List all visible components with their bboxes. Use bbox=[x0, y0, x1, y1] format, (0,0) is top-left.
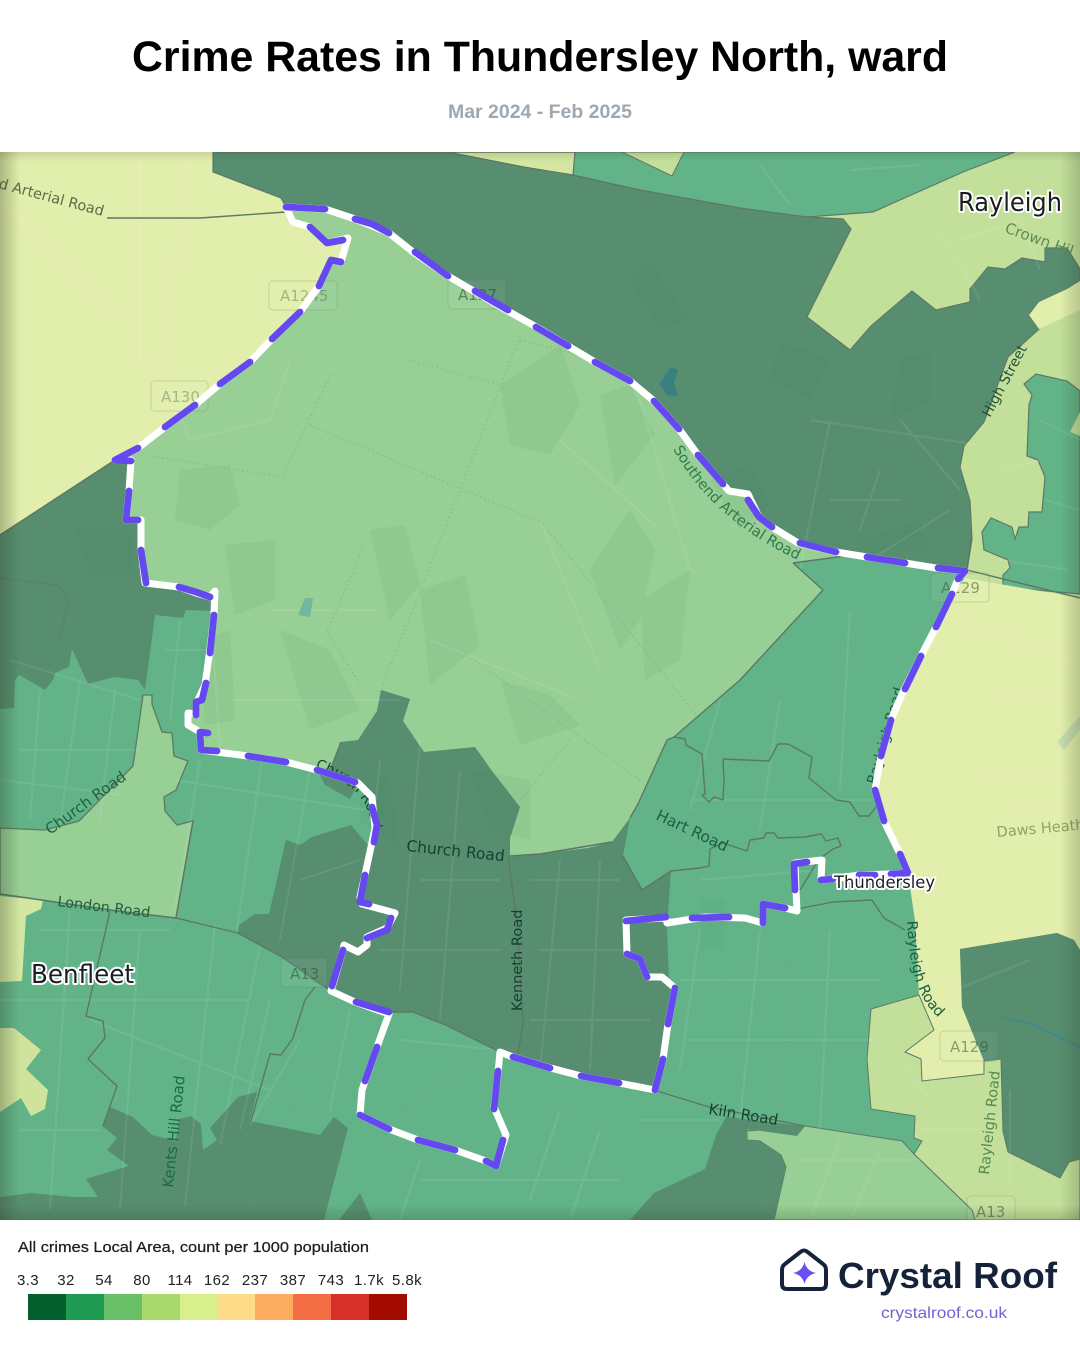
logo wordmark: Crystal Roof bbox=[838, 1255, 1058, 1296]
area: yellow sliver east edge bbox=[1070, 412, 1080, 436]
area: dark green west bbox=[0, 460, 212, 709]
area: yellow triangle north bbox=[622, 152, 684, 176]
legend scale values: 162 bbox=[204, 1272, 230, 1289]
road label: Church Road west: Church Road bbox=[42, 768, 130, 838]
road label: Church Road (under ward line): Church Road bbox=[317, 760, 383, 826]
area: mid green north strip bbox=[573, 152, 1015, 217]
area: dark green Kents Hill bbox=[0, 1092, 348, 1220]
legend colour bar bbox=[28, 1294, 407, 1320]
area: yellow-green north-east bbox=[780, 152, 1080, 598]
road label: Church Road centre: Church Road bbox=[406, 837, 506, 865]
road shield labels: A1245 bbox=[280, 287, 328, 305]
area: pale strip north bbox=[447, 152, 575, 176]
area: pale patch south-west bbox=[0, 1028, 48, 1116]
road shields bbox=[151, 280, 1015, 1226]
legend scale values: 237 bbox=[242, 1272, 268, 1289]
road label: High Street: High Street bbox=[979, 342, 1031, 420]
place label: Benfleet: Benfleet bbox=[31, 960, 134, 990]
area: pale yellow east bbox=[875, 578, 1080, 1081]
subtitle: date range: Mar 2024 - Feb 2025 bbox=[448, 102, 632, 123]
road label: Rayleigh Road south: Rayleigh Road bbox=[905, 922, 946, 1017]
legend scale values: 743 bbox=[318, 1272, 344, 1289]
website link text: crystalroof.co.uk bbox=[881, 1305, 1008, 1322]
road label: Rayleigh Road south-east: Rayleigh Road bbox=[976, 1070, 1004, 1175]
place label: Thundersley: Thundersley bbox=[833, 873, 935, 893]
legend scale values: 80 bbox=[133, 1272, 151, 1289]
road label: Southend Arterial Road: Southend Arterial Road bbox=[674, 446, 802, 560]
logo: Crystal Roof bbox=[782, 1250, 1058, 1322]
icon: house outline bbox=[782, 1250, 826, 1289]
map edge vignette bbox=[0, 152, 1080, 1220]
icon: crystal star bbox=[793, 1262, 816, 1284]
road shield labels: A129 bbox=[950, 1038, 989, 1056]
panel: choropleth map bbox=[0, 152, 1080, 1220]
legend scale values: 5.8k bbox=[392, 1272, 422, 1289]
road label: Hart Road: Hart Road bbox=[653, 806, 731, 855]
area: pale patch north-east bbox=[1029, 281, 1080, 329]
legend scale values bbox=[17, 1272, 422, 1289]
area: light green Church Road west bbox=[0, 695, 193, 918]
ward boundary: purple dashes bbox=[115, 207, 965, 1166]
place label: Rayleigh: Rayleigh bbox=[958, 188, 1062, 218]
road label: Arterial Road: d Arterial Road bbox=[0, 176, 106, 220]
road label: Kenneth Road: Kenneth Road bbox=[509, 909, 526, 1011]
road shield labels: A13 bbox=[290, 965, 319, 983]
area: light green south bbox=[747, 1126, 975, 1220]
area: pale patch Benfleet bbox=[0, 896, 43, 982]
legend title: All crimes Local Area, count per 1000 population bbox=[18, 1239, 369, 1256]
road shield labels: A130 bbox=[161, 388, 200, 406]
legend scale values: 54 bbox=[95, 1272, 113, 1289]
legend scale values: 114 bbox=[167, 1272, 193, 1289]
legend scale values: 1.7k bbox=[354, 1272, 384, 1289]
legend bbox=[17, 1239, 422, 1320]
road network bbox=[0, 160, 1080, 1220]
road label: Rayleigh Road north (under ward line): Rayleigh Road bbox=[864, 686, 907, 786]
area: dark green north bbox=[213, 152, 1080, 570]
area: dark patch south bbox=[339, 1193, 372, 1220]
area: mid green island east bbox=[982, 374, 1080, 594]
area: light green ward core bbox=[115, 207, 845, 856]
road label: Kiln Road: Kiln Road bbox=[707, 1100, 779, 1129]
ward boundary: white casing bbox=[115, 207, 965, 1166]
legend scale values: 32 bbox=[57, 1272, 75, 1289]
road shield labels: A129 bbox=[941, 579, 980, 597]
boundary lines bbox=[0, 212, 1080, 1126]
dotted footpaths bbox=[152, 336, 830, 1110]
area: dark green Church Road bbox=[238, 690, 675, 1090]
road shield labels: A13 bbox=[976, 1203, 1005, 1221]
area: dark green south-east bbox=[960, 933, 1080, 1178]
road shield labels: A127 bbox=[458, 286, 497, 304]
water: ponds and stream bbox=[298, 367, 1080, 1047]
legend scale values: 387 bbox=[280, 1272, 306, 1289]
title: Crime Rates in Thundersley North, ward bbox=[132, 33, 948, 81]
road label: Kents Hill Road: Kents Hill Road bbox=[159, 1075, 189, 1188]
road label: London Road: London Road bbox=[57, 894, 151, 921]
legend scale values: 3.3 bbox=[17, 1272, 39, 1289]
road shield labels bbox=[161, 286, 1005, 1221]
road label: Crown Hill: Crown Hil bbox=[1003, 219, 1076, 260]
building patches bbox=[75, 260, 930, 950]
area: dark green south bbox=[630, 1117, 805, 1220]
area: yellow-green south-east bbox=[867, 995, 1080, 1220]
area: pale yellow north-west bbox=[0, 152, 348, 535]
